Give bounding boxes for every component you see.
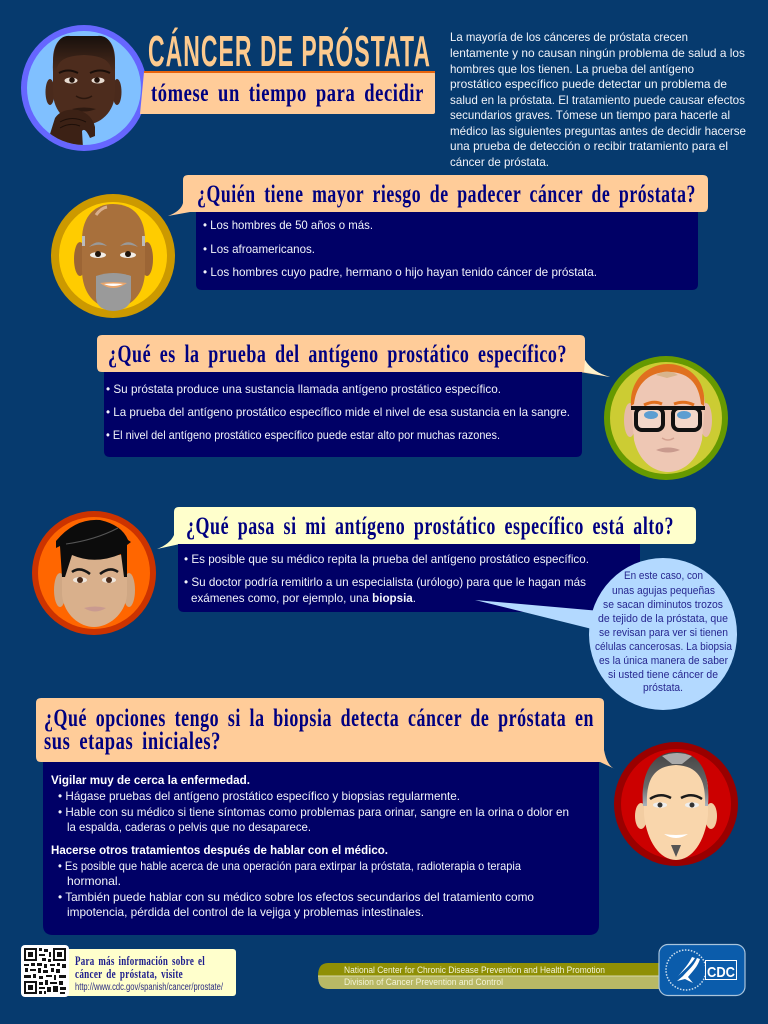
intro paragraph: prostático específico puede detectar un problema de — [450, 77, 727, 91]
intro paragraph: hombres que los tienen. La prueba del antígeno — [450, 62, 694, 76]
QR code — [21, 945, 69, 997]
footer: agency band — [318, 963, 660, 989]
title: CÁNCER DE PRÓSTATA — [148, 26, 431, 76]
intro paragraph: una prueba de detección o recibir tratamiento para el — [450, 139, 728, 153]
footer: agency band: Division of Cancer Prevention and Control — [344, 977, 503, 987]
panel: options: • Hágase pruebas del antígeno prostático específico y biopsias regularmente. — [58, 789, 460, 803]
intro paragraph: cáncer de próstata. — [450, 155, 549, 169]
panel: high PSA: exámenes como, por ejemplo, una biopsia. — [191, 591, 416, 605]
callout: biopsy explanation: de tejido de la próstata, que — [598, 613, 728, 625]
panel: PSA test — [104, 372, 582, 457]
question 1 bubble — [168, 175, 708, 216]
footer: website box with QR code: Para más información sobre el — [75, 953, 205, 968]
panel: who is at risk: • Los hombres de 50 años o más. — [203, 218, 373, 232]
intro paragraph: lentamente y no causan ningún problema de salud a los — [450, 46, 745, 60]
callout: biopsy explanation: próstata. — [643, 682, 683, 694]
question 4 bubble: sus etapas iniciales? — [44, 728, 221, 755]
intro paragraph — [450, 30, 746, 169]
callout: biopsy explanation: es la única manera de saber — [599, 655, 728, 667]
panel: options: impotencia, pérdida del control de la vejiga y problemas intestinales. — [67, 905, 424, 919]
panel: options: hormonal. — [67, 874, 121, 888]
question 3 bubble — [157, 507, 696, 549]
icon: CDC logo — [659, 944, 745, 996]
intro paragraph: médico las siguientes preguntas antes de decidir hacerse — [450, 124, 746, 138]
callout: biopsy explanation: si usted tiene cáncer de — [608, 669, 718, 681]
icon: CDC logo: CDC — [707, 964, 735, 981]
callout: biopsy explanation — [475, 558, 737, 710]
subtitle banner — [140, 71, 435, 114]
avatar: man with black glasses and red hair — [604, 356, 728, 480]
avatar: man with grey hair and goatee — [614, 742, 738, 866]
panel: options: • Hable con su médico si tiene síntomas como problemas para orinar, sangre en la orina o dolor en — [58, 805, 569, 819]
panel: options: Vigilar muy de cerca la enfermedad. — [51, 773, 250, 787]
avatar: older man with grey goatee — [51, 194, 175, 318]
panel: options: • También puede hablar con su médico sobre los efectos secundarios del tratamiento como — [58, 890, 534, 904]
panel: PSA test: • Su próstata produce una sustancia llamada antígeno prostático específico. — [106, 382, 501, 396]
panel: who is at risk — [196, 212, 698, 290]
intro paragraph: La mayoría de los cánceres de próstata crecen — [450, 30, 688, 44]
subtitle banner: tómese un tiempo para decidir — [151, 80, 424, 107]
question 4 bubble — [36, 698, 615, 769]
footer: website box with QR code — [21, 945, 236, 997]
callout: biopsy explanation: unas agujas pequeñas — [612, 585, 715, 597]
panel: options: Hacerse otros tratamientos después de hablar con el médico. — [51, 843, 388, 857]
footer: agency band: National Center for Chronic Disease Prevention and Health Promotion — [344, 965, 605, 975]
intro paragraph: secundarios graves. Tómese un tiempo para hacerle al — [450, 108, 730, 122]
panel: who is at risk: • Los hombres cuyo padre, hermano o hijo hayan tenido cáncer de próstata. — [203, 265, 597, 279]
question 2 bubble — [97, 335, 610, 377]
header: avatar of thinking man — [21, 25, 147, 151]
intro paragraph: salud en la próstata. El tratamiento puede causar efectos — [450, 93, 745, 107]
footer: website box with QR code: http://www.cdc.gov/spanish/cancer/prostate/ — [75, 982, 223, 993]
panel: options — [43, 762, 599, 935]
callout: biopsy explanation: En este caso, con — [624, 570, 703, 582]
callout: biopsy explanation: se revisan para ver si tienen — [599, 627, 728, 639]
panel: high PSA: • Su doctor podría remitirlo a un especialista (urólogo) para que le hagan más — [184, 575, 586, 589]
callout: biopsy explanation: células cancerosas. La biopsia — [595, 641, 733, 653]
panel: options: la espalda, caderas o pelvis que no desaparece. — [67, 820, 311, 834]
panel: PSA test: • El nivel del antígeno prostático específico puede estar alto por muchas razones. — [106, 428, 500, 442]
panel: PSA test: • La prueba del antígeno prostático específico mide el nivel de esa sustancia en la sangre. — [106, 405, 570, 419]
footer: website box with QR code: cáncer de próstata, visite — [75, 966, 183, 981]
panel: high PSA — [178, 544, 640, 612]
panel: options: • Es posible que hable acerca de una operación para extirpar la próstata, radioterapia o terapia — [58, 859, 521, 873]
avatar: man with black quiff — [32, 511, 156, 635]
question 2 bubble: ¿Qué es la prueba del antígeno prostático específico? — [108, 341, 567, 368]
callout: biopsy explanation: se sacan diminutos trozos — [603, 599, 723, 611]
panel: who is at risk: • Los afroamericanos. — [203, 242, 315, 256]
panel: high PSA: • Es posible que su médico repita la prueba del antígeno prostático específico. — [184, 552, 589, 566]
